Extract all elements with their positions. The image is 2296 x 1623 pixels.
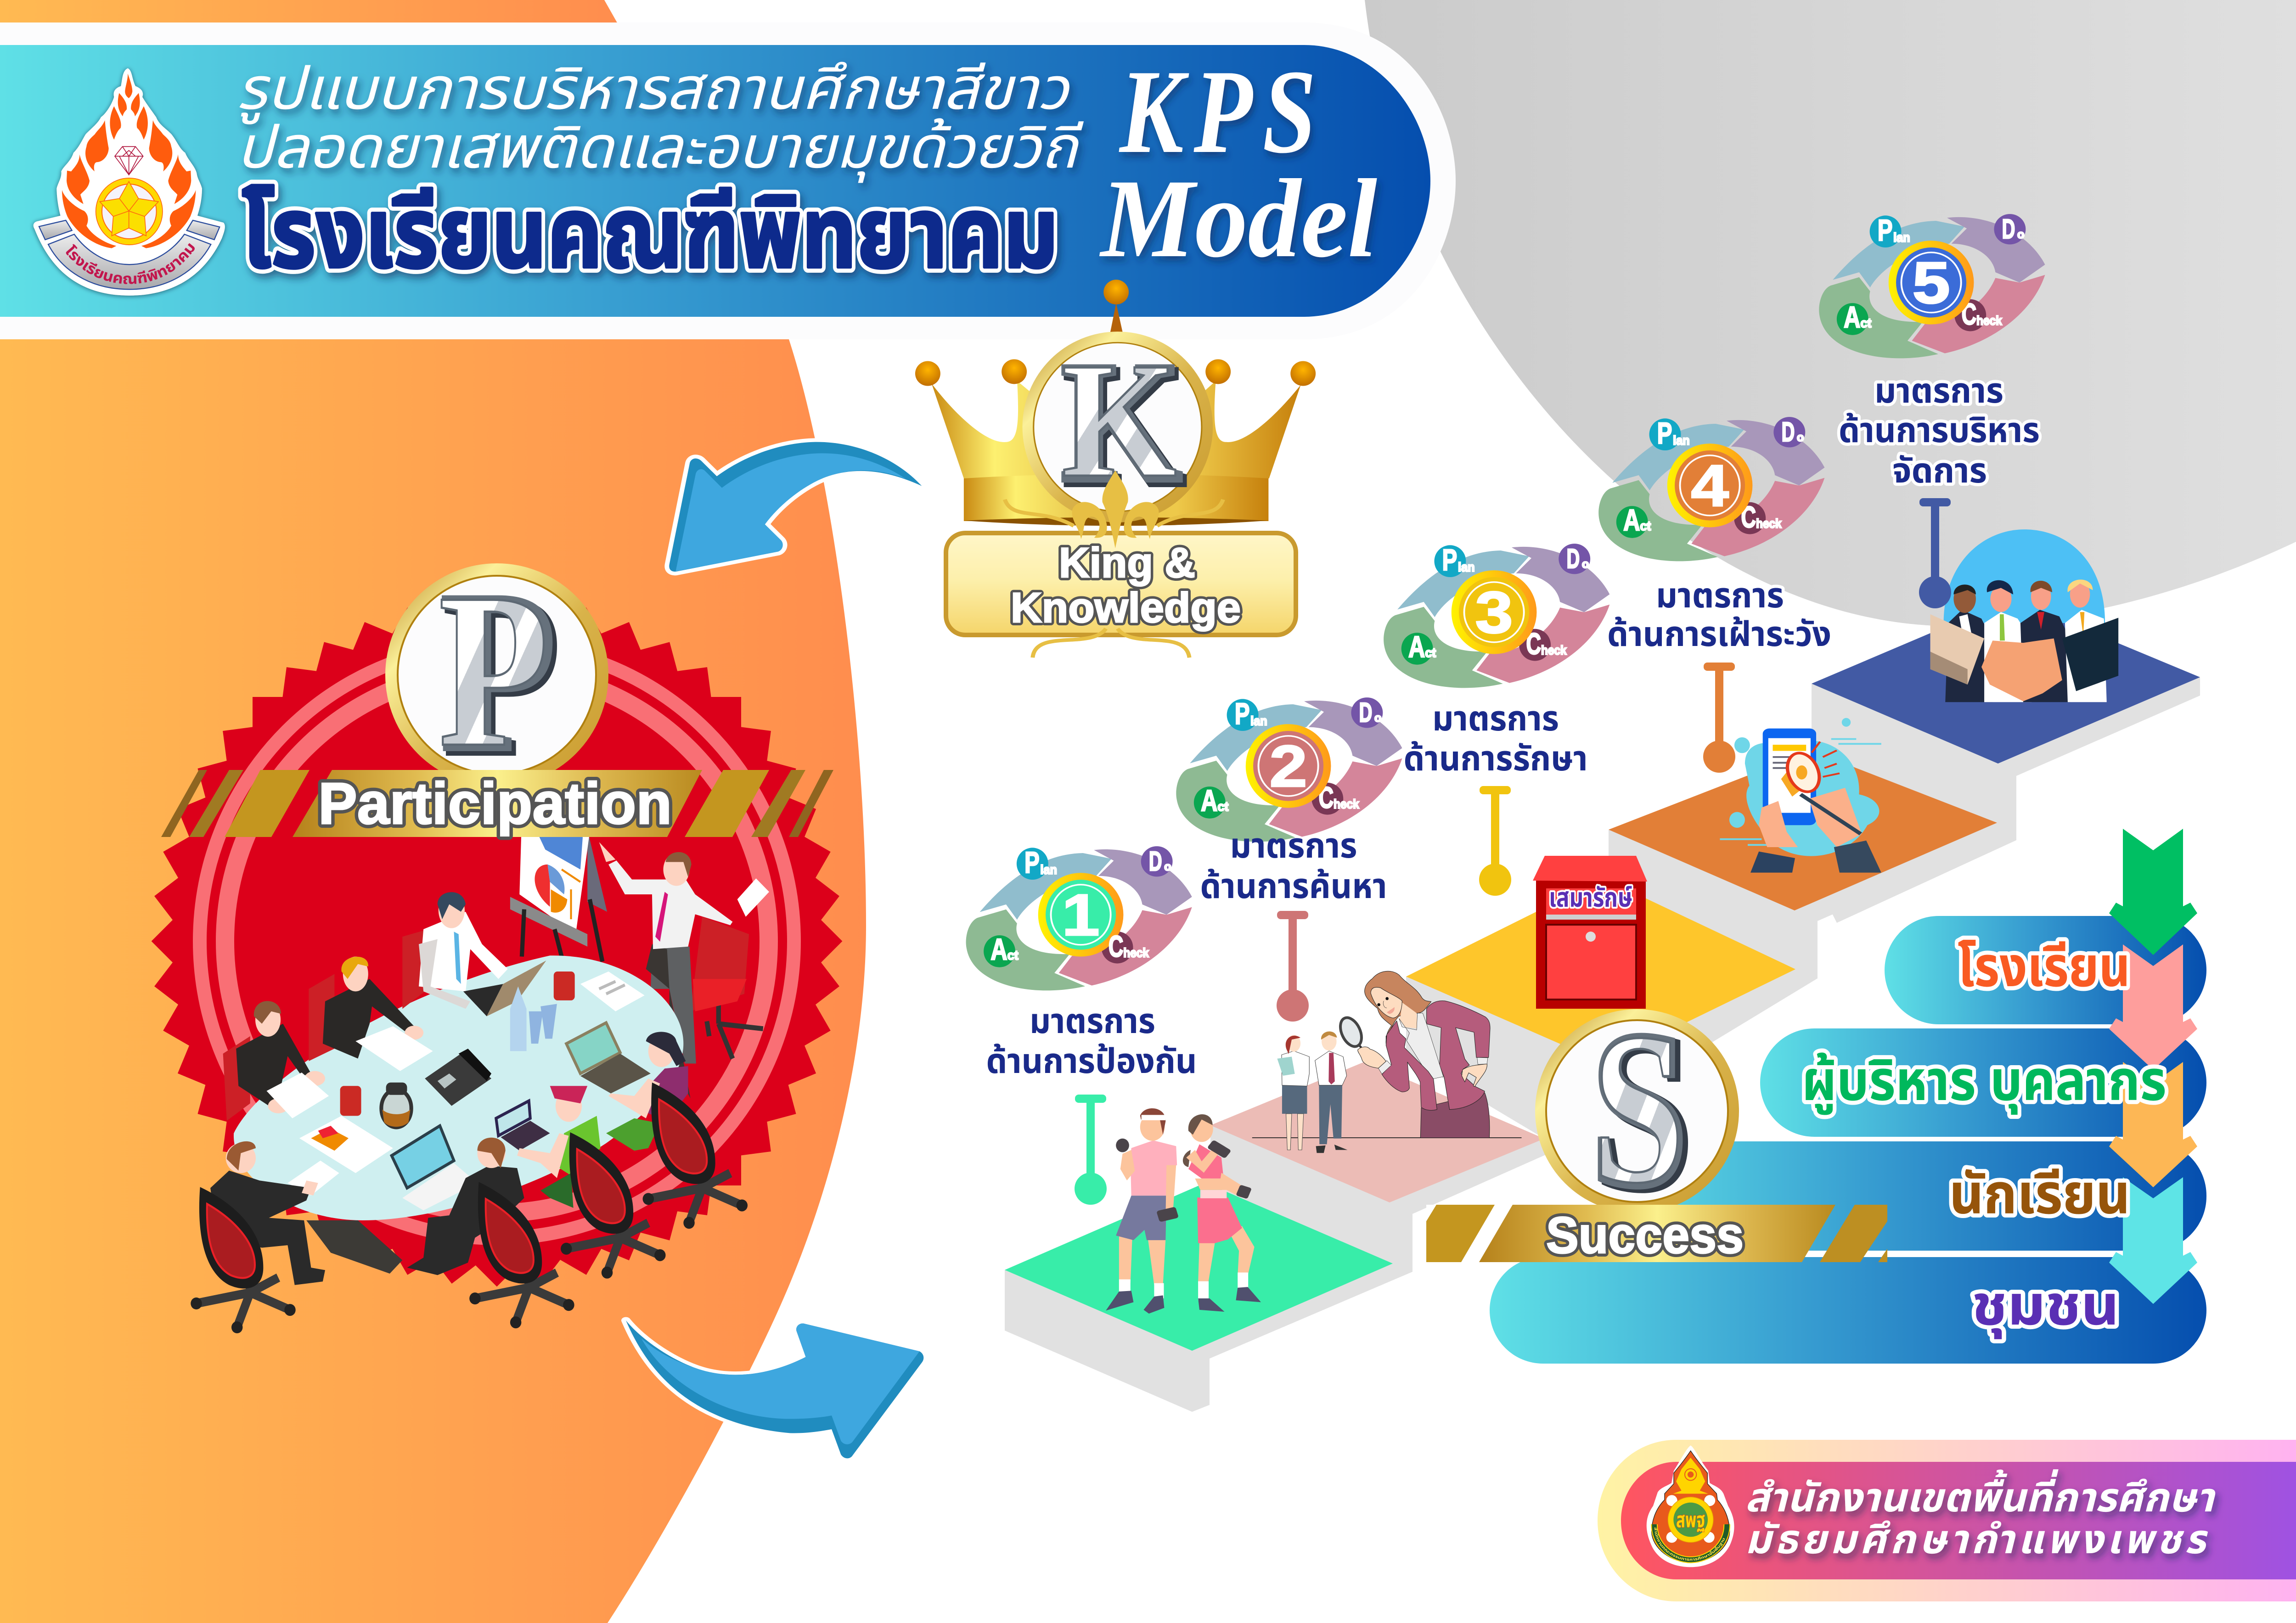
man <box>1106 1108 1179 1314</box>
PDCA cycle 4: lan <box>1673 433 1690 448</box>
label: school: โรงเรียน <box>1958 936 2130 998</box>
mailbox knob <box>1586 932 1596 942</box>
hands <box>1750 788 1881 873</box>
presenter <box>599 842 769 1098</box>
table base <box>306 1220 402 1274</box>
label: students: นักเรียน <box>1949 1163 2130 1225</box>
Success ribbon <box>1426 1205 1887 1264</box>
laptop <box>463 960 546 1016</box>
PDCA cycle 3: D <box>1567 543 1580 574</box>
measure label 3 <box>1403 699 1588 778</box>
PDCA cycle 3: C <box>1526 627 1541 660</box>
S medallion: S <box>1591 984 1688 1233</box>
crown <box>915 280 1316 526</box>
logo outline <box>34 68 225 296</box>
logo ribbon <box>39 220 219 289</box>
mailbox panel <box>1546 925 1636 1000</box>
PDCA cycle 1: D <box>1149 846 1162 876</box>
emblem lotus <box>1666 1495 1715 1543</box>
arrow: green <box>2109 829 2197 955</box>
PDCA cycle 2: ct <box>1218 799 1228 814</box>
logo flames <box>62 73 196 248</box>
left sleeve <box>1930 614 1984 685</box>
measure label 5: มาตรการ <box>1874 371 2003 410</box>
measure label 3: มาตรการ <box>1432 699 1559 738</box>
logo diamond <box>115 146 143 175</box>
emblem monogram <box>1668 1497 1713 1542</box>
mailbox <box>1533 856 1647 1009</box>
pin 5 <box>1919 498 1951 608</box>
measure label 4: ด้านการเฝ้าระวัง <box>1607 615 1831 654</box>
PDCA cycle 1: heck <box>1123 945 1149 960</box>
Participation ribbon: Participation <box>318 771 672 837</box>
S medallion: S <box>1595 987 1693 1236</box>
seal and participation panel <box>152 544 842 1333</box>
seated blond man <box>309 956 423 1061</box>
PDCA cycle 4 <box>1598 416 1824 561</box>
mailbox roof <box>1533 856 1647 882</box>
PDCA cycle 1: ct <box>1007 948 1019 963</box>
Model wordmark: Model <box>1099 156 1377 281</box>
measure label 4: มาตรการ <box>1656 576 1784 615</box>
step 4 platform <box>1609 751 1997 1010</box>
K crown emblem <box>915 280 1316 657</box>
step 1 platform <box>1005 1183 1412 1412</box>
PDCA cycle 3: P <box>1442 544 1457 577</box>
PDCA cycle 5: heck <box>1976 313 2002 328</box>
PDCA cycle 2: 2 <box>1269 733 1307 799</box>
footer line 2: มัธยมศึกษากำแพงเพชร <box>1745 1516 2208 1562</box>
PDCA cycle 5: o <box>2017 228 2024 241</box>
emblem ribbon <box>1654 1524 1727 1560</box>
purple shirt woman <box>606 1032 688 1151</box>
back view man left <box>210 1141 325 1285</box>
PDCA cycle 4: A <box>1623 504 1640 537</box>
measure label 5 <box>1839 371 2040 490</box>
icon: district emblem: สำนักงานคณะกรรมการการศึกษาขั้นพื้นฐาน <box>1653 1527 1726 1561</box>
PDCA cycle 2: C <box>1319 781 1334 814</box>
blazer left <box>1382 1021 1437 1110</box>
illustration: two small figures <box>1252 1031 1521 1153</box>
PDCA cycle 1: P <box>1024 846 1040 879</box>
arrow: pink <box>2109 944 2197 1070</box>
K letter: K <box>1061 327 1182 517</box>
small man <box>1315 1031 1348 1153</box>
PDCA cycle 3: o <box>1582 558 1589 571</box>
illustration: phone and megaphone <box>1720 718 1881 873</box>
background: gray arc top right <box>1365 0 2296 626</box>
hands <box>1358 1047 1487 1087</box>
PDCA cycle 1: o <box>1164 860 1171 873</box>
PDCA cycle 2: lan <box>1250 714 1267 728</box>
hair <box>1365 971 1431 1044</box>
PDCA cycle 3: ct <box>1425 646 1436 660</box>
step 2 platform <box>1210 1061 1561 1286</box>
blazer right <box>1427 1001 1490 1110</box>
S medallion <box>1535 984 1739 1236</box>
PDCA cycle 5 <box>1819 213 2045 358</box>
background: orange arc panel top <box>0 0 620 28</box>
arrow: cyan <box>2109 1177 2197 1304</box>
logo star disc <box>96 178 163 245</box>
header title line 1: รูปแบบการบริหารสถานศึกษาสีขาว <box>236 56 1070 124</box>
Success ribbon: Success <box>1546 1207 1744 1264</box>
K letter: K <box>1062 328 1177 511</box>
arrow: top curved arrow <box>669 442 922 572</box>
PDCA cycle 2: P <box>1235 697 1249 730</box>
header white outline <box>0 22 1456 339</box>
measure label 2: มาตรการ <box>1230 826 1357 865</box>
PDCA cycle 1 <box>966 846 1192 990</box>
Participation ribbon <box>161 770 833 837</box>
KPS wordmark: KPS <box>1119 45 1316 178</box>
pill: school <box>1885 916 2206 1024</box>
K letter: K <box>1064 331 1185 521</box>
neck and face <box>1371 987 1418 1028</box>
magnifying glass <box>1336 1014 1375 1064</box>
emblem crest <box>1673 1458 1708 1494</box>
red starburst seal <box>152 596 842 1286</box>
measure label 2: ด้านการค้นหา <box>1200 867 1387 906</box>
PDCA cycle 3: A <box>1408 630 1425 663</box>
small woman <box>1277 1035 1309 1150</box>
presenter chair <box>691 917 763 1059</box>
logo ribbon text: โรงเรียนคณฑีพิทยาคม <box>62 239 199 287</box>
illustration: fitness couple <box>1106 1108 1261 1314</box>
dome <box>1944 529 2105 623</box>
PDCA cycle 5: lan <box>1893 230 1910 245</box>
pills stack <box>1490 829 2206 1364</box>
footer line 1: สำนักงานเขตพื้นที่การศึกษา <box>1745 1469 2216 1520</box>
emblem outline <box>1647 1445 1734 1567</box>
school name: โรงเรียนคณฑีพิทยาคม <box>242 178 1058 288</box>
King label: King & <box>1059 539 1195 586</box>
PDCA cycle 2: o <box>1374 712 1381 724</box>
footer outer pill <box>1598 1440 2296 1601</box>
PDCA cycle 1: C <box>1109 930 1123 963</box>
Participation ribbon: Participation <box>318 771 672 837</box>
S medallion: S <box>1593 988 1684 1228</box>
background: orange arc panel <box>0 335 866 1623</box>
emblem body <box>1652 1451 1730 1562</box>
P medallion <box>385 544 608 802</box>
PDCA cycle 1: lan <box>1041 863 1057 877</box>
staircase <box>1005 599 2200 1412</box>
PDCA cycle 3: heck <box>1541 643 1567 657</box>
S success emblem <box>1426 984 1887 1264</box>
step 5 platform <box>1812 599 2200 923</box>
blouse <box>1399 1013 1443 1079</box>
PDCA cycle 2: D <box>1359 697 1372 728</box>
skirt <box>1420 1093 1490 1138</box>
meeting illustration <box>191 785 769 1333</box>
footer badge <box>1598 1440 2296 1601</box>
header banner <box>0 22 1456 339</box>
pin 1 <box>1075 1095 1107 1205</box>
seated dark suit man <box>223 1001 325 1121</box>
measure label 4 <box>1607 576 1831 654</box>
step 3 platform <box>1406 878 1818 1139</box>
PDCA cycle 2: heck <box>1334 797 1359 811</box>
PDCA cycle 1: 1 <box>1062 882 1100 948</box>
header title line 2: ปลอดยาเสพติดและอบายมุขด้วยวิถี <box>236 115 1084 183</box>
PDCA cycle 3 <box>1384 543 1609 688</box>
illustration: woman with magnifying glass <box>1336 971 1490 1138</box>
team heads and suits <box>1945 579 2107 702</box>
right sleeve <box>2062 618 2118 691</box>
measure label 1: ด้านการป้องกัน <box>986 1042 1197 1081</box>
PDCA cycle 5: D <box>2002 213 2015 244</box>
PDCA cycle 4: P <box>1657 417 1672 450</box>
woman <box>1183 1114 1261 1312</box>
school name: โรงเรียนคณฑีพิทยาคม <box>242 178 1058 288</box>
pin 4 <box>1703 663 1735 773</box>
pins <box>1075 498 1951 1205</box>
table <box>234 955 683 1220</box>
measure label 1: มาตรการ <box>1030 1002 1155 1041</box>
green shirt woman <box>517 1086 601 1208</box>
mailbox slot <box>1546 888 1636 920</box>
chairs <box>191 1083 748 1333</box>
PDCA cycle 3: 3 <box>1475 579 1513 646</box>
mailbox label: เสมารักษ์ <box>1549 883 1632 913</box>
P medallion: P <box>439 548 549 793</box>
PDCA cycle 4: ct <box>1640 519 1651 534</box>
arrow: orange <box>2109 1062 2197 1187</box>
PDCA cycle 4: C <box>1741 500 1756 534</box>
megaphone <box>1720 739 1881 845</box>
icon: district emblem <box>1647 1445 1734 1567</box>
phone <box>1763 729 1816 825</box>
pin 3 <box>1479 786 1511 896</box>
arrow: bottom curved arrow <box>626 1320 923 1458</box>
icon: school logo <box>34 68 225 296</box>
label box <box>946 533 1296 635</box>
pill: community <box>1490 1257 2206 1364</box>
footer inner pill <box>1621 1462 2296 1579</box>
King label: King & <box>1059 539 1195 586</box>
seated man white shirt <box>402 892 508 1009</box>
measure label 5: ด้านการบริหาร <box>1839 411 2040 450</box>
illustration: handshake team <box>1930 529 2118 702</box>
label: staff: ผู้บริหาร บุคลากร <box>1802 1050 2167 1115</box>
Knowledge label: Knowledge <box>1011 584 1241 631</box>
pill: students <box>1607 1141 2206 1251</box>
flip chart <box>510 785 607 961</box>
PDCA cycle 2 <box>1176 697 1402 842</box>
PDCA cycle 4: 4 <box>1691 453 1729 519</box>
cuffs <box>1379 1057 1488 1074</box>
table items <box>266 972 651 1210</box>
Success ribbon: Success <box>1546 1207 1744 1264</box>
Knowledge label: Knowledge <box>1011 584 1241 631</box>
PDCA cycle 5: ct <box>1861 316 1871 331</box>
PDCA cycle 3: lan <box>1458 560 1474 574</box>
PDCA cycle 5: A <box>1844 301 1861 334</box>
PDCA cycle 4: o <box>1797 431 1804 444</box>
emblem monogram: สพฐ <box>1676 1508 1705 1532</box>
mailbox body <box>1536 881 1646 1009</box>
measure label 2 <box>1200 826 1387 906</box>
label: community: ชุมชน <box>1972 1274 2119 1339</box>
P medallion: P <box>445 548 559 802</box>
PDCA cycle 5: C <box>1962 298 1976 331</box>
header gradient pill <box>0 45 1430 317</box>
back view man center <box>407 1138 524 1275</box>
fleur-de-lis ornament <box>1005 471 1223 657</box>
handshake <box>1981 638 2062 701</box>
PDCA cycle 5: P <box>1878 214 1892 247</box>
PDCA cycle 5: 5 <box>1912 250 1950 316</box>
measure label 3: ด้านการรักษา <box>1403 739 1588 778</box>
measure label 5: จัดการ <box>1892 451 1987 490</box>
pill: staff <box>1760 1028 2206 1137</box>
PDCA cycle 1: A <box>990 933 1007 966</box>
PDCA cycle 4: D <box>1782 416 1795 447</box>
measure label 1 <box>986 1002 1197 1081</box>
P medallion: P <box>441 544 556 798</box>
PDCA cycle 4: heck <box>1756 516 1782 531</box>
pin 2 <box>1277 911 1309 1022</box>
PDCA cycle 2: A <box>1201 784 1218 817</box>
